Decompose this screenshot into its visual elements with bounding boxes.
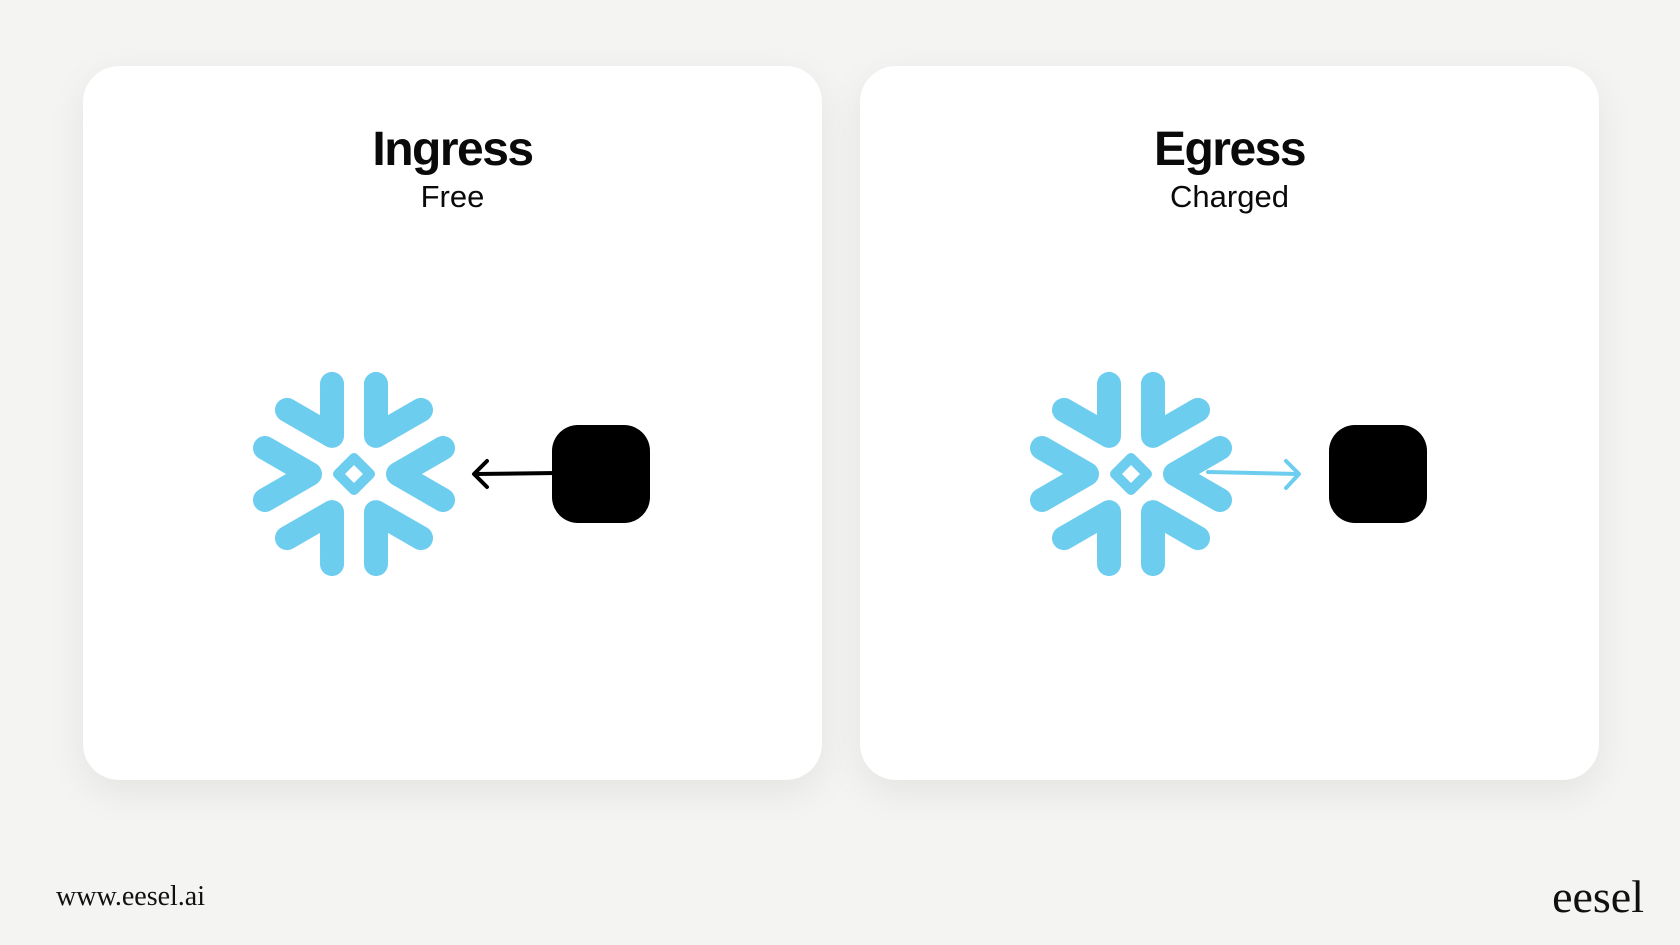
footer logo: eesel: [1552, 871, 1644, 922]
subheading: Free: Free: [421, 179, 484, 214]
arrow: egress (from snowflake): [1208, 461, 1299, 488]
panel: ingress: [83, 66, 822, 780]
arrow: ingress (to snowflake): [474, 461, 556, 487]
icon: snowflake left: [265, 384, 443, 564]
heading: Egress: Egress: [1154, 123, 1305, 176]
footer url: www.eesel.ai: [56, 881, 205, 912]
icon: black square left: [552, 425, 650, 523]
icon: black square right: [1329, 425, 1427, 523]
heading: Ingress: Ingress: [372, 123, 533, 176]
panel: egress: [860, 66, 1599, 780]
icon: snowflake right: [1042, 384, 1220, 564]
subheading: Charged: Charged: [1170, 179, 1289, 214]
